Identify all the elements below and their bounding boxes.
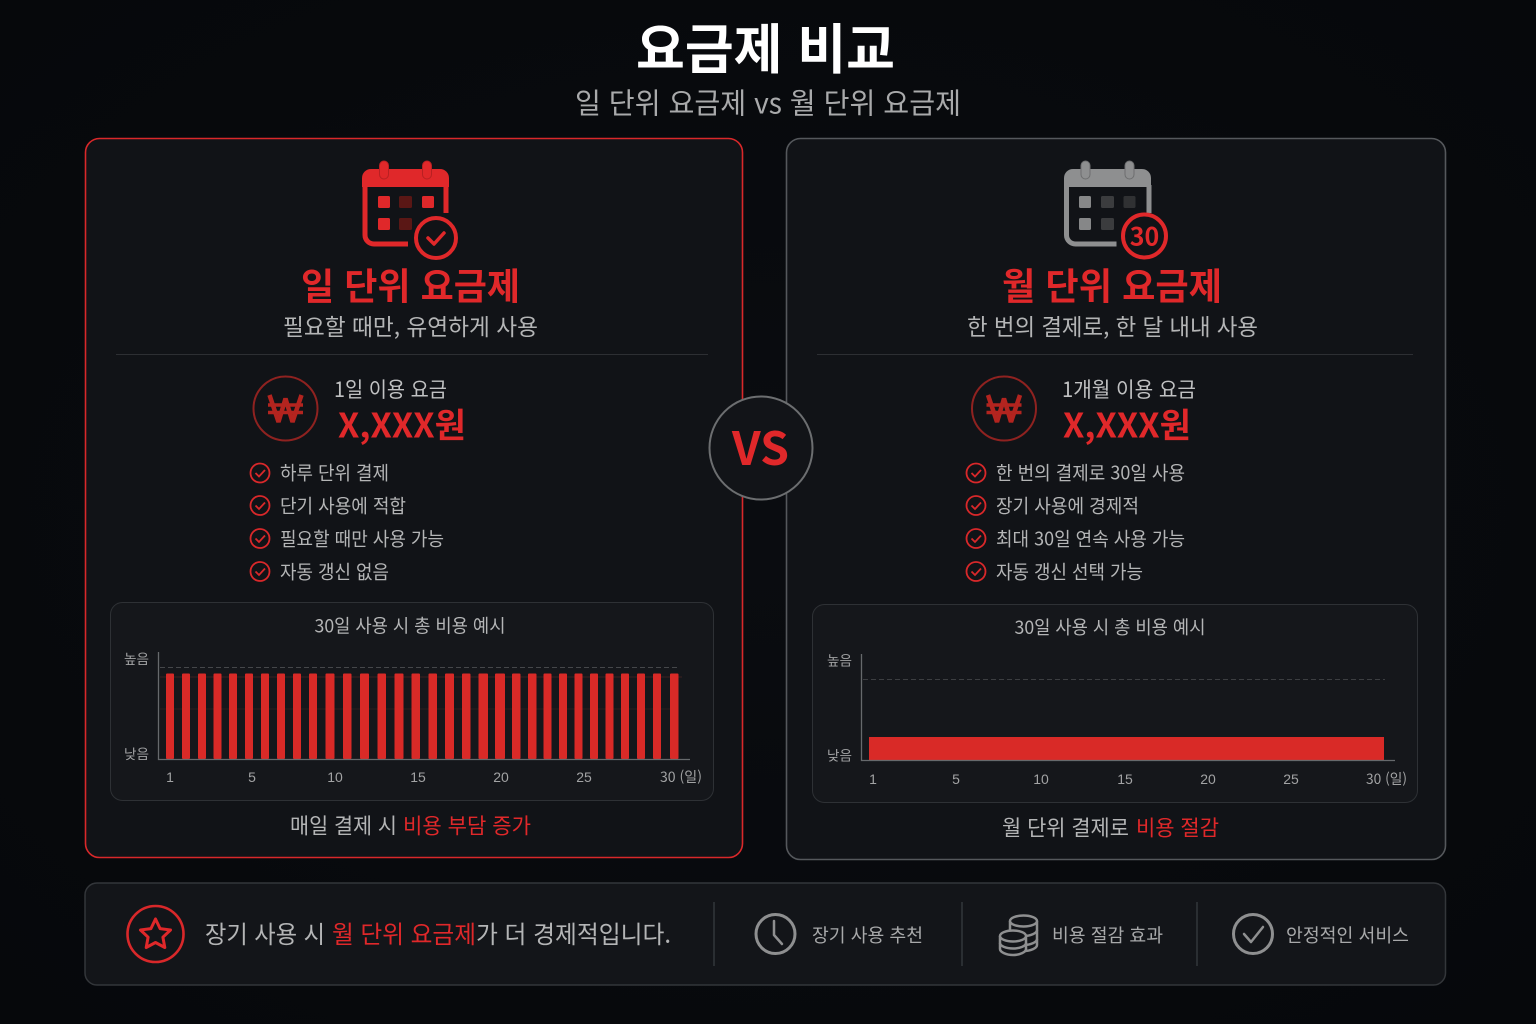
bar chart: daily cost: 낮음 — [124, 743, 149, 763]
tagline: daily plan: 필요할 때만, 유연하게 사용 — [283, 308, 538, 342]
label: cost saving effect: 비용 절감 효과 — [1052, 922, 1163, 948]
bar chart: daily cost: 5 — [248, 769, 256, 785]
panel: daily plan — [86, 138, 742, 858]
bar chart: daily cost: 높음 — [124, 648, 149, 668]
price label: daily: 1일 이용 요금 — [334, 374, 447, 404]
icon: check circle — [1234, 914, 1272, 954]
bar chart: monthly cost: 30일 사용 시 총 비용 예시 — [1014, 614, 1206, 640]
icon: red calendar with check — [362, 161, 456, 258]
bar chart: daily cost — [110, 602, 714, 800]
heading: daily plan: 일 단위 요금제 — [301, 256, 520, 310]
bar chart: daily cost: 20 — [493, 769, 509, 785]
bar chart: daily cost: 1 — [166, 769, 174, 785]
bar chart: monthly cost: 5 — [952, 771, 960, 787]
checklist: monthly: 장기 사용에 경제적 — [996, 492, 1139, 518]
icon: grey calendar with 30 badge: 30 — [1130, 218, 1159, 254]
checklist: monthly: 한 번의 결제로 30일 사용 — [996, 458, 1185, 486]
icon: clock — [756, 914, 795, 954]
bar chart: daily cost: 30일 사용 시 총 비용 예시 — [314, 612, 506, 638]
bar chart: monthly cost: 30 (일) — [1366, 769, 1407, 789]
panel: recommendation bar — [85, 883, 1446, 985]
icon: won coin — [254, 376, 318, 440]
icon: coins — [1000, 916, 1037, 955]
checklist: monthly: 최대 30일 연속 사용 가능 — [996, 524, 1185, 552]
caption: monthly: 월 단위 결제로 — [1002, 812, 1129, 842]
recommendation text: 월 단위 요금제 — [332, 916, 476, 951]
bar chart: monthly cost: 25 — [1283, 771, 1299, 787]
checklist: monthly — [966, 458, 1185, 584]
bar chart: monthly cost — [812, 604, 1418, 802]
bar chart: daily cost: 10 — [327, 769, 343, 785]
bar chart: monthly cost: 1 — [869, 771, 877, 787]
bar chart: monthly cost: 10 — [1033, 771, 1049, 787]
label: stable service: 안정적인 서비스 — [1286, 922, 1409, 948]
checklist: monthly: 자동 갱신 선택 가능 — [996, 558, 1143, 584]
heading: monthly plan: 월 단위 요금제 — [1002, 256, 1222, 310]
price label: monthly: 1개월 이용 요금 — [1062, 374, 1196, 404]
caption: monthly: 비용 절감 — [1136, 812, 1219, 842]
checklist: daily: 자동 갱신 없음 — [280, 558, 389, 584]
bar chart: monthly cost: 낮음 — [827, 744, 852, 764]
VS badge: VS — [731, 413, 789, 479]
price: daily: X,XXX원 — [338, 398, 466, 448]
label: long-term recommendation: 장기 사용 추천 — [812, 922, 923, 948]
bar chart: daily cost: 25 — [576, 769, 592, 785]
recommendation text — [205, 916, 671, 951]
checklist: daily: 단기 사용에 적합 — [280, 492, 406, 518]
icon: won coin — [972, 376, 1036, 440]
bar chart: daily cost: 15 — [410, 769, 426, 785]
bar chart: daily cost: 30 (일) — [660, 767, 702, 787]
subtitle: 일 단위 요금제 vs 월 단위 요금제 — [575, 80, 961, 122]
recommendation text: 장기 사용 시 — [205, 916, 325, 951]
bar chart: monthly cost: 15 — [1117, 771, 1133, 787]
VS badge — [710, 396, 812, 500]
title: 요금제 비교 — [636, 6, 895, 84]
checklist: daily: 필요할 때만 사용 가능 — [280, 524, 444, 552]
tagline: monthly plan: 한 번의 결제로, 한 달 내내 사용 — [967, 308, 1258, 342]
checklist: daily — [250, 458, 444, 584]
bar chart: monthly cost: 높음 — [827, 650, 852, 670]
caption: monthly — [1002, 812, 1219, 842]
caption: daily: 매일 결제 시 — [290, 810, 397, 840]
bar chart: monthly cost: 20 — [1200, 771, 1216, 787]
icon: star badge — [128, 906, 184, 962]
caption: daily — [290, 810, 531, 840]
icon: grey calendar with 30 badge — [1064, 161, 1166, 258]
checklist: daily: 하루 단위 결제 — [280, 458, 389, 486]
caption: daily: 비용 부담 증가 — [403, 810, 531, 840]
price: monthly: X,XXX원 — [1063, 398, 1191, 448]
recommendation text: 가 더 경제적입니다. — [476, 916, 671, 951]
panel: monthly plan — [786, 138, 1446, 860]
